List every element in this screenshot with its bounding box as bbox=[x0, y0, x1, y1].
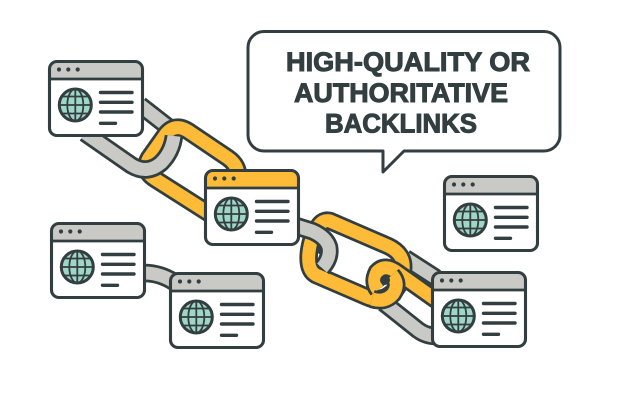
chain link: gray lower arm and hook bbox=[85, 133, 174, 170]
window: lower middle bbox=[170, 273, 264, 348]
chain link: long yellow link bbox=[309, 221, 403, 299]
heading text: AUTHORITATIVE bbox=[294, 78, 508, 108]
chain link: gray arms behind the right chain bbox=[384, 258, 436, 336]
chain link: gray upper arm from top-left window bbox=[140, 105, 172, 130]
chain link: yellow link to the center window bbox=[147, 128, 238, 214]
window: lower left bbox=[51, 223, 145, 298]
heading text bbox=[286, 47, 530, 138]
chain link: gray connector between lower left windows bbox=[144, 273, 174, 282]
speech bubble callout bbox=[248, 32, 560, 172]
heading text: BACKLINKS bbox=[325, 108, 477, 138]
window: top left bbox=[49, 61, 143, 136]
chain link: short yellow link into the lower right window bbox=[372, 268, 436, 300]
window: upper right bbox=[444, 176, 538, 250]
window: lower right bbox=[432, 272, 526, 346]
chain link: gray hook from the center window bbox=[296, 226, 329, 268]
heading text: HIGH-QUALITY OR bbox=[286, 47, 530, 77]
window: center, yellow header bbox=[205, 170, 299, 244]
